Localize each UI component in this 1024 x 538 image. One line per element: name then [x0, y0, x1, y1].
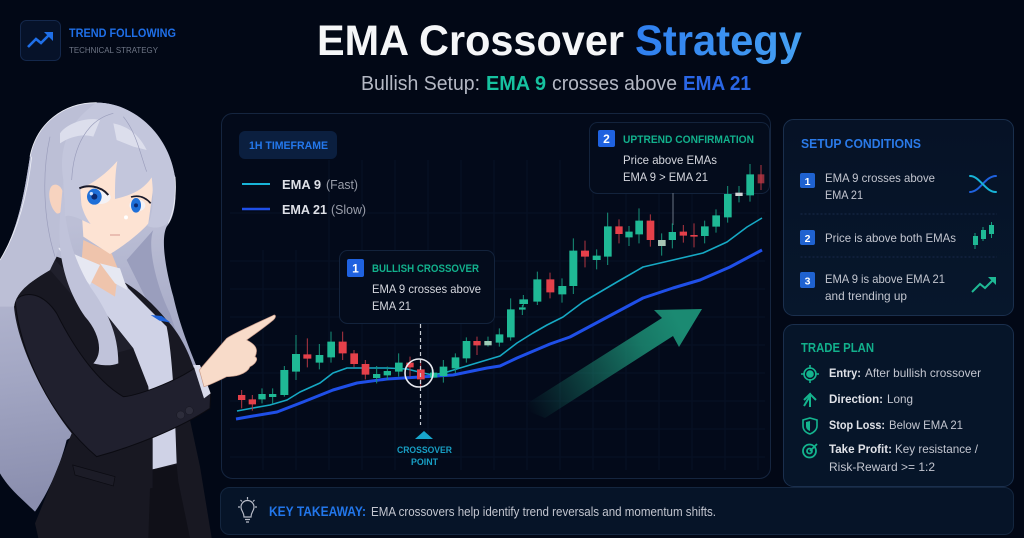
condition 2: Price is above both EMAs: [825, 231, 956, 245]
logo block: [20, 20, 176, 60]
callout 2: uptrend confirmation: Price above EMAs: [623, 153, 717, 167]
subtitle: crosses above: [552, 73, 677, 95]
legend: (Fast): [326, 177, 358, 192]
candlesticks: left section: [238, 328, 503, 411]
timeframe badge: [239, 131, 337, 159]
take profit row: Take Profit:: [829, 442, 892, 456]
callout 2: uptrend confirmation: [590, 122, 770, 225]
subtitle: Bullish Setup:: [361, 73, 480, 95]
side strands over chest: [59, 180, 118, 365]
crossover point label: [397, 431, 452, 468]
face: [80, 158, 155, 254]
right back hair shading: [127, 230, 177, 333]
eye left: [79, 186, 111, 205]
jacket lapel: [50, 260, 133, 353]
sleeve buttons: [177, 407, 193, 419]
heading: setup conditions: SETUP CONDITIONS: [801, 137, 921, 151]
callout 1: bullish crossover: EMA 9 crosses above: [372, 282, 481, 296]
belt and trousers: [148, 465, 190, 538]
stop loss row: [829, 418, 963, 432]
takeaway text: KEY TAKEAWAY:: [269, 504, 366, 519]
icon: trend up arrow: [972, 277, 996, 292]
EMA 21 line: [236, 250, 762, 419]
take profit row: Key resistance /: [895, 442, 979, 456]
condition 1: [800, 171, 935, 202]
icon: bullseye: [803, 444, 817, 458]
heading: trade plan: TRADE PLAN: [801, 341, 874, 355]
callout 1: bullish crossover: [340, 250, 494, 324]
entry row: After bullish crossover: [865, 366, 981, 380]
legend: EMA 21: [282, 202, 327, 217]
jacket pocket: [73, 465, 115, 486]
legend: [242, 177, 366, 217]
neck: [82, 240, 118, 297]
condition 1: EMA 9 crosses above: [825, 171, 935, 185]
direction row: Direction:: [829, 392, 883, 406]
shirt cuff: [193, 365, 211, 398]
callout 2: uptrend confirmation: 2: [603, 132, 610, 146]
icon: crossing lines: [970, 176, 996, 192]
takeaway text: EMA crossovers help identify trend reversals and momentum shifts.: [371, 504, 716, 519]
left hair mass: [0, 103, 97, 307]
subtitle: EMA 9: [486, 73, 546, 95]
icon: trend arrow badge: [20, 20, 60, 60]
eye right: [129, 196, 151, 213]
subtitle: EMA 21: [683, 73, 751, 95]
candlesticks: right section: [507, 164, 764, 341]
condition 3: and trending up: [825, 289, 907, 303]
brand name: TREND FOLLOWING: [69, 26, 176, 40]
callout 1: bullish crossover: 1: [352, 262, 359, 276]
panel: setup conditions: [784, 120, 1014, 316]
subtitle: [361, 73, 751, 95]
crossover marker: [405, 324, 433, 425]
panel: chart: [222, 114, 770, 478]
condition 2: 2: [805, 233, 811, 245]
timeframe badge: 1H TIMEFRAME: [249, 140, 328, 152]
icon: direction arrow: [804, 394, 816, 407]
jacket body: [14, 257, 212, 538]
take profit row: [829, 442, 979, 474]
ear: [49, 185, 63, 214]
panel: key takeaway: [220, 488, 1014, 534]
EMA 9 line: [237, 218, 762, 411]
icon: shield: [803, 418, 817, 434]
title: Strategy: [635, 17, 802, 65]
pocket square: [151, 315, 171, 323]
entry row: Entry:: [829, 366, 861, 380]
condition 1: 1: [805, 176, 811, 188]
jacket sleeve: [15, 295, 211, 457]
crossover point label: POINT: [411, 457, 438, 468]
brand subtitle: TECHNICAL STRATEGY: [69, 45, 158, 55]
take profit row: Risk-Reward >= 1:2: [829, 460, 935, 474]
crossover point label: CROSSOVER: [397, 445, 452, 456]
shirt: [58, 248, 177, 469]
hair outline strokes: [0, 103, 175, 260]
mouth and nose: [110, 215, 128, 235]
legend: EMA 9: [282, 177, 321, 192]
legend: (Slow): [331, 202, 366, 217]
direction row: [829, 392, 913, 406]
stop loss row: Stop Loss:: [829, 418, 885, 432]
callout 2: uptrend confirmation: EMA 9 > EMA 21: [623, 170, 708, 184]
uptrend arrow: [520, 309, 702, 418]
pointing hand: [199, 315, 275, 387]
stop loss row: Below EMA 21: [889, 418, 963, 432]
condition 3: [800, 272, 945, 303]
title: [317, 17, 802, 65]
callout 1: bullish crossover: EMA 21: [372, 299, 411, 313]
direction row: Long: [887, 392, 913, 406]
collar: [57, 247, 127, 290]
front bangs: [62, 103, 176, 228]
callout 2: uptrend confirmation: UPTREND CONFIRMATION: [623, 134, 754, 146]
panel: trade plan: [784, 324, 1014, 486]
condition 3: EMA 9 is above EMA 21: [825, 272, 945, 286]
callout 1: bullish crossover: BULLISH CROSSOVER: [372, 263, 479, 275]
hair highlights: [60, 119, 147, 150]
condition 1: EMA 21: [825, 188, 863, 202]
back hair: [0, 103, 197, 512]
hair strand lines: [45, 113, 147, 257]
title: EMA Crossover: [317, 17, 624, 65]
icon: rising candles: [973, 222, 994, 249]
illustration: silver-haired analyst pointing at chart: [0, 103, 275, 538]
condition 3: 3: [805, 276, 811, 288]
icon: light bulb: [238, 497, 257, 522]
icon: entry target: [801, 365, 819, 383]
